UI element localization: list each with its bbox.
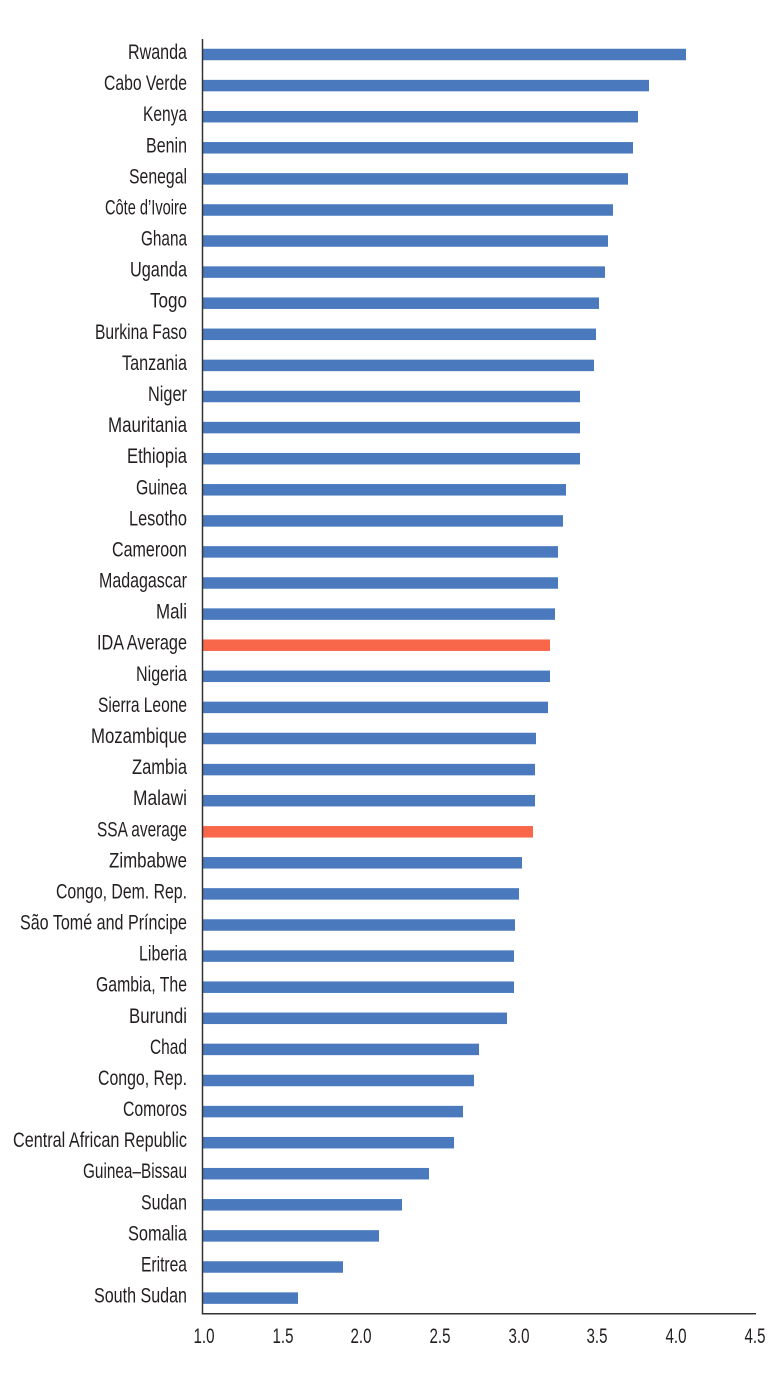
row: Sierra Leone: Sierra Leone	[98, 694, 187, 717]
row: Ghana	[141, 228, 608, 250]
row: Togo	[150, 290, 599, 313]
row: Burundi	[129, 1005, 507, 1028]
chart axes	[202, 39, 756, 1314]
row: Ethiopia: Ethiopia	[127, 445, 187, 468]
row: Kenya	[143, 103, 638, 126]
row: Benin: Benin	[146, 134, 187, 157]
row: Cabo Verde	[104, 72, 649, 95]
row: Burkina Faso	[95, 321, 596, 344]
row: IDA Average: IDA Average	[97, 632, 187, 655]
row: South Sudan	[94, 1285, 298, 1308]
row: Congo, Rep.	[98, 1067, 474, 1090]
row: Gambia, The: Gambia, The	[96, 974, 187, 997]
row: Senegal	[129, 165, 628, 188]
row: Eritrea	[141, 1254, 343, 1276]
row: Sierra Leone	[98, 694, 548, 717]
row: Côte d'Ivoire	[105, 196, 613, 220]
row: Chad: Chad	[150, 1036, 187, 1059]
x-axis tick labels	[194, 1325, 766, 1348]
row: Somalia	[128, 1222, 379, 1245]
row: Kenya: Kenya	[143, 103, 187, 126]
row: Congo, Rep.: Congo, Rep.	[98, 1067, 187, 1090]
x-axis tick labels: 3.0	[508, 1325, 530, 1348]
row: Niger	[148, 383, 580, 406]
row: Rwanda: Rwanda	[128, 41, 187, 64]
row: Liberia: Liberia	[139, 943, 187, 966]
x-axis tick labels: 1.5	[272, 1325, 294, 1348]
row: Congo, Dem. Rep.	[56, 880, 519, 903]
row: Comoros: Comoros	[123, 1098, 187, 1121]
row: Zambia: Zambia	[132, 756, 187, 779]
row: Malawi	[133, 787, 535, 810]
row: Lesotho	[129, 507, 563, 530]
row: Comoros	[123, 1098, 463, 1121]
row: Malawi: Malawi	[133, 787, 187, 810]
row: Côte d'Ivoire: Côte d’Ivoire	[105, 196, 187, 220]
row: Togo: Togo	[150, 290, 187, 313]
row: Uganda	[130, 259, 605, 282]
row: Benin	[146, 134, 633, 157]
x-axis tick labels: 4.0	[666, 1325, 686, 1348]
x-axis tick labels: 2.0	[350, 1325, 372, 1348]
row: Mali: Mali	[156, 601, 187, 624]
row: Nigeria: Nigeria	[136, 663, 187, 686]
row: Central African Republic	[13, 1129, 454, 1152]
row: Lesotho: Lesotho	[129, 507, 187, 530]
row: Rwanda	[128, 41, 686, 64]
row: Niger: Niger	[148, 383, 187, 406]
row: Somalia: Somalia	[128, 1222, 187, 1245]
row: Cameroon	[112, 538, 558, 561]
row: Cabo Verde: Cabo Verde	[104, 72, 187, 95]
row: Tanzania: Tanzania	[122, 352, 187, 375]
row: Guinea-Bissau	[83, 1160, 429, 1183]
row: Uganda: Uganda	[130, 259, 187, 282]
x-axis tick labels: 1.0	[194, 1325, 214, 1348]
row: Central African Republic: Central African Republic	[13, 1129, 187, 1152]
row: Madagascar	[99, 570, 558, 592]
row: Guinea: Guinea	[136, 476, 187, 499]
row: Gambia, The	[96, 974, 514, 997]
row: Senegal: Senegal	[129, 165, 187, 188]
row: Zimbabwe	[109, 849, 522, 872]
row: Chad	[150, 1036, 479, 1059]
row: SSA average	[97, 818, 533, 841]
row: Guinea	[136, 476, 566, 499]
row: Ghana: Ghana	[141, 228, 187, 250]
row: Zambia	[132, 756, 535, 779]
row: Eritrea: Eritrea	[141, 1254, 187, 1276]
row: Mozambique	[91, 725, 536, 748]
row: SSA average: SSA average	[97, 818, 187, 841]
x-axis tick labels: 2.5	[430, 1325, 450, 1348]
row: Guinea-Bissau: Guinea–Bissau	[83, 1160, 187, 1183]
row: Cameroon: Cameroon	[112, 538, 187, 561]
row: Sudan: Sudan	[141, 1191, 187, 1214]
row: Mali	[156, 601, 555, 624]
row: Nigeria	[136, 663, 550, 686]
row: IDA Average	[97, 632, 550, 655]
row: Burkina Faso: Burkina Faso	[95, 321, 187, 344]
x-axis tick labels: 4.5	[744, 1325, 766, 1348]
row: Mozambique: Mozambique	[91, 725, 187, 748]
row: Tanzania	[122, 352, 594, 375]
row: São Tomé and Príncipe: São Tomé and Príncipe	[20, 912, 187, 934]
row: Zimbabwe: Zimbabwe	[109, 849, 187, 872]
row: Sudan	[141, 1191, 402, 1214]
row: South Sudan: South Sudan	[94, 1285, 187, 1308]
x-axis tick labels: 3.5	[586, 1325, 608, 1348]
row: Ethiopia	[127, 445, 580, 468]
row: São Tomé and Príncipe	[20, 912, 515, 934]
row: Burundi: Burundi	[129, 1005, 187, 1028]
row: Liberia	[139, 943, 514, 966]
row: Mauritania: Mauritania	[108, 414, 187, 437]
row: Mauritania	[108, 414, 580, 437]
row: Madagascar: Madagascar	[99, 570, 187, 592]
row: Congo, Dem. Rep.: Congo, Dem. Rep.	[56, 880, 187, 903]
